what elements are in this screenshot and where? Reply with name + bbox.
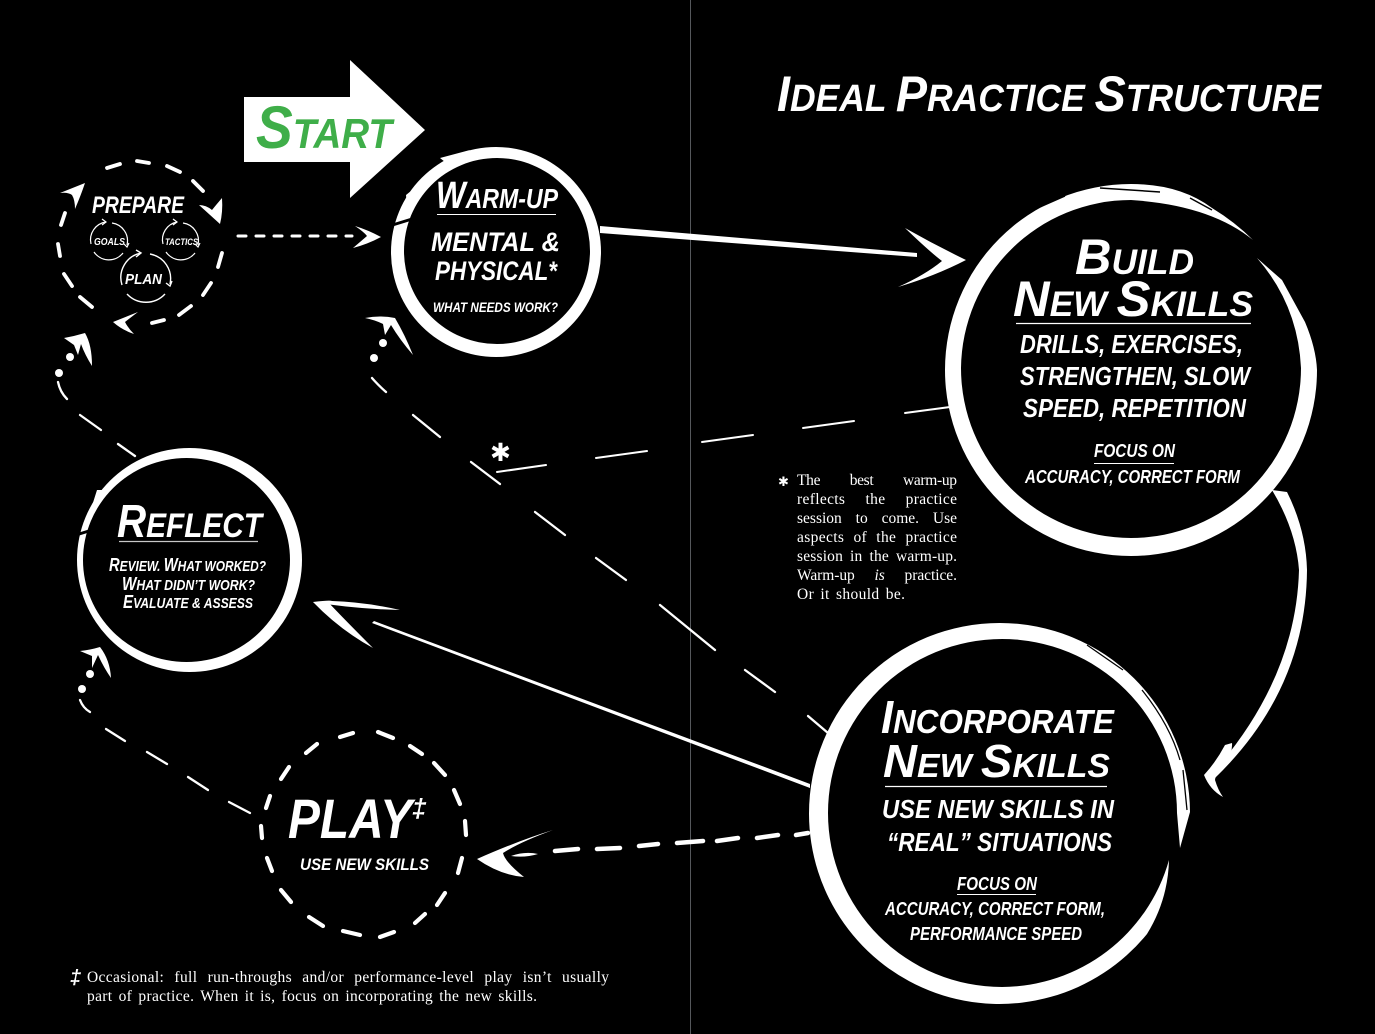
cycle: goals: GOALS <box>94 236 125 248</box>
reflect text: WHAT DIDN’T WORK? <box>122 574 255 594</box>
incorporate heading: INCORPORATE <box>881 691 1115 743</box>
note: warm-up: Or it should be. <box>797 586 905 603</box>
incorporate focus: FOCUS ON <box>957 874 1038 894</box>
asterisk icon: ✱ <box>490 438 511 467</box>
title: IDEAL PRACTICE STRUCTURE <box>777 66 1323 122</box>
build focus <box>1024 441 1241 487</box>
warm-up text <box>431 227 560 315</box>
incorporate heading <box>881 691 1115 787</box>
arrow: warm-up to build <box>600 226 966 287</box>
footnote: part of practice. When it is, focus on incorporating the new skills. <box>87 988 537 1005</box>
build text: SPEED, REPETITION <box>1023 393 1247 423</box>
warm-up heading: WARM-UP <box>436 175 558 217</box>
note: warm-up <box>778 472 957 603</box>
incorporate text <box>882 794 1115 857</box>
footnote <box>70 967 609 1005</box>
build heading <box>1013 229 1253 327</box>
dashed line: play to reflect <box>78 647 250 813</box>
dashed line: reflect to prepare <box>55 333 135 456</box>
build focus: ACCURACY, CORRECT FORM <box>1024 467 1241 487</box>
start arrow: START <box>256 94 395 161</box>
play heading: ‡ <box>412 793 427 823</box>
footnote: ‡ <box>70 967 81 989</box>
arrow: incorporate to reflect <box>313 601 810 788</box>
reflect heading: REFLECT <box>117 495 265 547</box>
warm-up text: MENTAL & <box>431 227 560 257</box>
play text: USE NEW SKILLS <box>300 855 430 874</box>
incorporate focus <box>884 874 1105 944</box>
arrow: incorporate to play <box>477 830 808 877</box>
panel: incorporate new skills <box>809 623 1190 1004</box>
panel: prepare <box>58 161 222 334</box>
cycle: tactics: TACTICS <box>165 237 199 248</box>
reflect text <box>109 555 266 612</box>
note: warm-up: Warm-up is practice. <box>797 567 957 584</box>
build text: STRENGTHEN, SLOW <box>1020 361 1252 391</box>
warm-up text: WHAT NEEDS WORK? <box>433 300 558 315</box>
incorporate focus: ACCURACY, CORRECT FORM, <box>884 899 1105 919</box>
incorporate focus: PERFORMANCE SPEED <box>910 924 1082 944</box>
panel: warm-up <box>386 147 601 357</box>
panel: play <box>261 732 466 937</box>
build text: DRILLS, EXERCISES, <box>1020 329 1243 359</box>
note: warm-up: session in the warm-up. <box>797 548 957 565</box>
cycle: goals <box>91 219 129 260</box>
cycle: plan: PLAN <box>125 271 163 288</box>
dashed line: build to warm-up note <box>497 407 950 472</box>
prepare label: PREPARE <box>92 192 185 219</box>
start arrow <box>244 60 425 198</box>
arrow: build to incorporate <box>1204 490 1307 797</box>
incorporate text: “REAL” SITUATIONS <box>887 827 1113 857</box>
incorporate heading: NEW SKILLS <box>883 735 1110 787</box>
note: warm-up: aspects of the practice <box>797 529 957 546</box>
build focus: FOCUS ON <box>1094 441 1176 461</box>
build heading: BUILD <box>1075 229 1194 285</box>
incorporate text: USE NEW SKILLS IN <box>882 794 1115 824</box>
cycle: plan <box>121 250 172 302</box>
note: warm-up: The best warm-up <box>797 472 957 489</box>
panel: build new skills <box>945 184 1317 556</box>
note: warm-up: session to come. Use <box>797 510 957 527</box>
reflect text: REVIEW. WHAT WORKED? <box>109 555 266 575</box>
footnote: Occasional: full run-throughs and/or performance-level play isn’t usually <box>87 969 609 986</box>
note: warm-up: ✱ <box>778 475 789 490</box>
note: warm-up: reflects the practice <box>797 491 957 508</box>
play heading: PLAY <box>288 787 416 850</box>
cycle: tactics <box>162 219 200 260</box>
reflect text: EVALUATE & ASSESS <box>123 592 253 612</box>
dashed line: warm-up review path <box>365 316 828 733</box>
arrow: prepare to warm-up <box>238 226 381 248</box>
panel: reflect <box>76 448 302 672</box>
build heading: NEW SKILLS <box>1013 271 1253 327</box>
build text <box>1020 329 1252 423</box>
warm-up text: PHYSICAL* <box>435 256 558 286</box>
